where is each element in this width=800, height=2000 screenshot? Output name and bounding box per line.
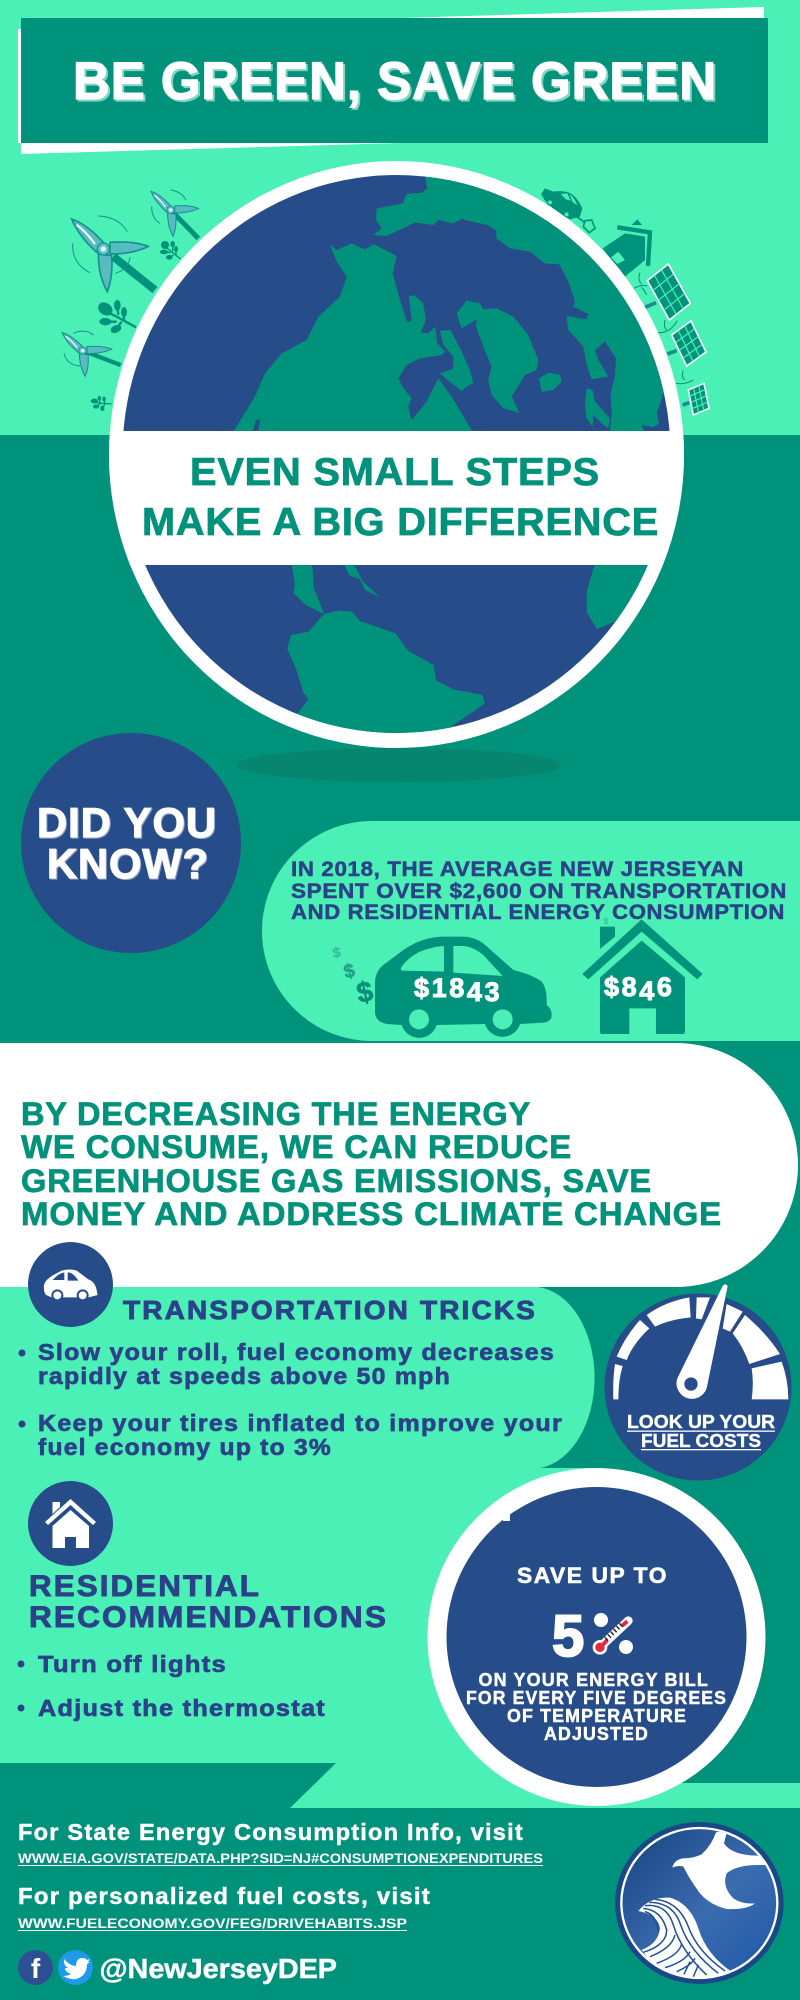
footer: state energy link: For State Energy Consumption Info, visit — [18, 1819, 524, 1845]
text: transportation tips: rapidly at speeds above 50 mph — [38, 1363, 451, 1389]
gauge: look up your fuel costs: LOOK UP YOUR — [627, 1411, 775, 1432]
globe — [100, 161, 707, 782]
callout: save up to 5% — [428, 1468, 766, 1806]
did you know circle: KNOW? — [47, 840, 209, 887]
background: mint upper area — [0, 0, 800, 435]
spending text — [291, 858, 787, 924]
heading: transportation tricks: TRANSPORTATION TRICKS — [123, 1295, 537, 1325]
footer: fuel cost link: For personalized fuel costs, visit — [18, 1883, 431, 1909]
gauge: look up your fuel costs — [604, 1284, 792, 1480]
did you know circle — [21, 733, 241, 953]
footer: fuel cost link — [18, 1883, 431, 1931]
callout: save up to 5%: ADJUSTED — [544, 1723, 649, 1744]
did you know circle: DID YOU — [37, 799, 217, 846]
text: residential tips — [18, 1651, 326, 1721]
panel: white energy message — [0, 1043, 798, 1287]
heading: even small steps: EVEN SMALL STEPS — [190, 451, 600, 494]
callout: save up to 5%: SAVE UP TO — [517, 1563, 668, 1588]
callout: save up to 5%: FOR EVERY FIVE DEGREES — [466, 1687, 727, 1708]
icon: house with cost: 4 — [639, 976, 657, 1006]
spending text: IN 2018, THE AVERAGE NEW JERSEYAN — [291, 858, 744, 881]
text: residential tips: Adjust the thermostat — [38, 1695, 326, 1721]
text: transportation tips: Slow your roll, fuel economy decreases — [38, 1339, 555, 1365]
text: residential tips: Turn off lights — [38, 1651, 227, 1677]
panel: white energy message: BY DECREASING THE ENERGY — [21, 1096, 531, 1132]
icon: transportation car badge — [28, 1242, 113, 1327]
footer: fuel cost link: WWW.FUELECONOMY.GOV/FEG/DRIVEHABITS.JSP — [18, 1915, 407, 1931]
icon: car with cost: $ — [342, 960, 358, 983]
icon: car with cost: 43 — [467, 977, 502, 1007]
spending text: SPENT OVER $2,600 ON TRANSPORTATION — [291, 880, 787, 903]
globe ocean — [122, 175, 670, 733]
gauge: look up your fuel costs: FUEL COSTS — [641, 1430, 761, 1451]
figure: 5 percent with thermometer — [552, 1604, 633, 1669]
footer: state energy link — [18, 1819, 543, 1866]
footer: social handle: @NewJerseyDEP — [100, 1953, 337, 1984]
heading: make a big difference: MAKE A BIG DIFFERENCE — [142, 501, 659, 544]
panel: energy spending — [262, 821, 800, 1041]
icon: house with cost: 6 — [657, 972, 674, 1002]
icon: car with cost: $18 — [414, 973, 467, 1003]
heading: residential recommendations: RESIDENTIAL — [29, 1570, 261, 1603]
spending text: AND RESIDENTIAL ENERGY CONSUMPTION — [291, 901, 785, 924]
globe white rim — [109, 161, 684, 748]
globe land masses — [233, 170, 707, 753]
figure: 5 percent with thermometer: 5 — [552, 1604, 584, 1669]
title banner — [18, 7, 768, 154]
panel: white energy message: GREENHOUSE GAS EMISSIONS, SAVE — [21, 1163, 652, 1199]
icon: house with cost: $8 — [604, 972, 639, 1002]
logo: NJDEP seal — [615, 1822, 784, 1988]
panel: white energy message: WE CONSUME, WE CAN REDUCE — [21, 1129, 572, 1165]
icon: house with cost: $ — [604, 916, 609, 926]
panel: white energy message: MONEY AND ADDRESS CLIMATE CHANGE — [21, 1196, 722, 1232]
text: transportation tips — [18, 1339, 563, 1460]
callout: save up to 5%: ON YOUR ENERGY BILL — [478, 1669, 709, 1690]
icon: facebook: f — [31, 1953, 41, 1984]
icon: residential house badge — [28, 1481, 113, 1566]
icons: right car, house and solar panels — [541, 188, 709, 415]
icons: left wind turbines and plants — [62, 190, 199, 411]
heading: residential recommendations: RECOMMENDATIONS — [29, 1601, 388, 1634]
icon: car with cost — [331, 937, 552, 1038]
footer: state energy link: WWW.EIA.GOV/STATE/DATA.PHP?SID=NJ#CONSUMPTIONEXPENDITURES — [18, 1850, 543, 1866]
background: dark green lower area — [0, 435, 800, 2000]
panel: tips mint background — [0, 1287, 800, 1808]
icon: house with cost — [582, 916, 703, 1034]
icon: facebook — [18, 1950, 53, 1985]
globe white band — [100, 431, 700, 565]
text: transportation tips: Keep your tires inflated to improve your — [38, 1410, 563, 1436]
title: BE GREEN, SAVE GREEN — [73, 52, 717, 111]
icon: twitter — [58, 1950, 93, 1985]
heading: residential recommendations — [29, 1570, 388, 1634]
callout: save up to 5%: OF TEMPERATURE — [507, 1705, 687, 1726]
icon: car with cost: $ — [354, 975, 376, 1010]
globe shadow — [237, 748, 561, 782]
icon: car with cost: $ — [331, 944, 342, 961]
text: transportation tips: fuel economy up to 3% — [38, 1434, 332, 1460]
